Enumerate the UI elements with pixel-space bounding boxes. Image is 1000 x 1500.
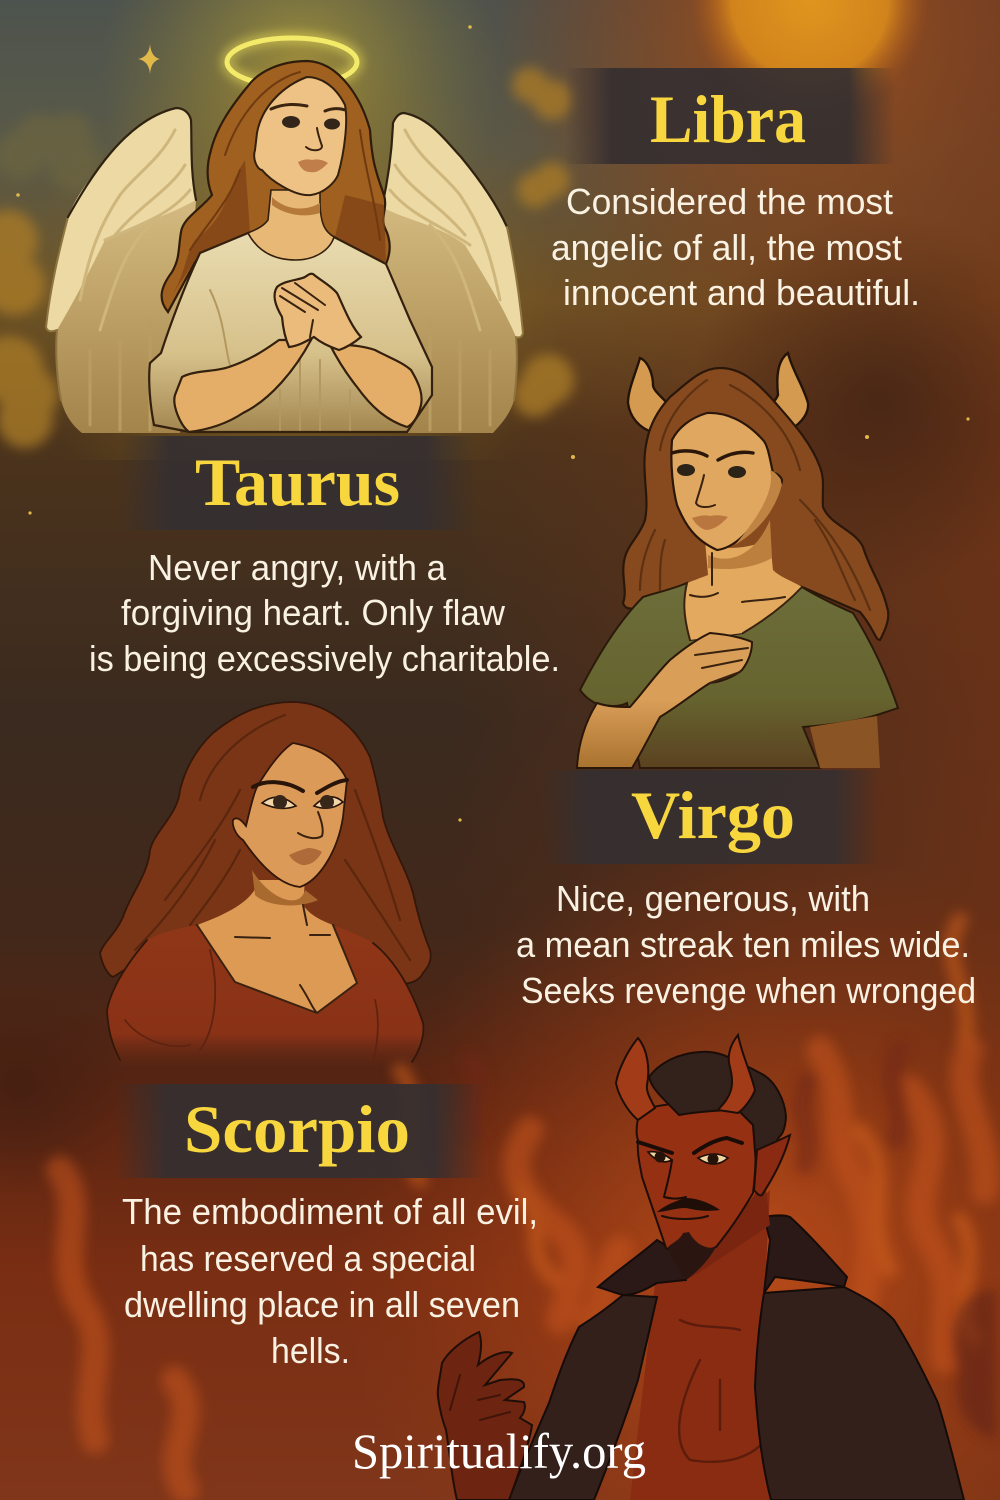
neckline — [197, 905, 357, 1013]
text: Scorpio description: hells. — [271, 1330, 350, 1371]
banner: Taurus — [120, 436, 475, 530]
horns — [616, 1035, 755, 1120]
neck and chest — [197, 880, 357, 1013]
face — [233, 743, 347, 887]
text: Virgo description: Seeks revenge when wronged — [521, 970, 976, 1011]
right collar — [764, 1216, 847, 1293]
horns — [628, 353, 808, 432]
dress — [107, 925, 423, 1068]
hair — [623, 368, 888, 640]
heading: Libra: Libra — [650, 81, 806, 157]
text: Taurus description — [89, 547, 560, 679]
text: Virgo description: Nice, generous, with — [556, 878, 870, 919]
shirt — [580, 583, 898, 768]
jacket — [509, 1216, 964, 1500]
figure: angel — [46, 38, 523, 433]
text: Taurus description: is being excessively charitable. — [89, 638, 560, 679]
hair — [100, 702, 431, 983]
text: Virgo description: a mean streak ten miles wide. — [516, 924, 970, 965]
text: Libra description: Considered the most — [566, 181, 893, 222]
halo — [227, 38, 357, 86]
face — [671, 413, 782, 550]
left wing — [46, 108, 196, 433]
praying hands — [275, 274, 361, 350]
raised hand — [438, 1332, 532, 1500]
text: Libra description — [551, 181, 920, 313]
neck lines — [684, 553, 802, 640]
tunic — [149, 233, 432, 432]
collars — [598, 1240, 690, 1295]
text: Scorpio description — [122, 1191, 538, 1371]
neck and chest — [684, 540, 802, 640]
right wing — [382, 113, 523, 433]
banner: Virgo — [540, 770, 880, 864]
star and sparks — [16, 25, 970, 822]
figure: stern woman — [100, 702, 431, 1068]
devil head — [616, 1035, 790, 1280]
figure: woman with horns — [577, 353, 898, 768]
neck shadow — [272, 197, 320, 215]
heading: Scorpio: Scorpio — [184, 1091, 410, 1167]
text: Libra description: angelic of all, the most — [551, 227, 902, 268]
text: Scorpio description: The embodiment of all evil, — [122, 1191, 538, 1232]
torso — [630, 1190, 780, 1500]
neck shadow — [252, 870, 318, 905]
hand on chest — [577, 633, 752, 768]
chest lines — [679, 1320, 765, 1462]
text: Virgo description — [516, 878, 976, 1011]
text: Taurus description: forgiving heart. Only flaw — [121, 592, 506, 633]
neck — [680, 1180, 770, 1280]
text: Libra description: innocent and beautiful. — [563, 272, 920, 313]
banner: Libra — [565, 68, 895, 164]
right arm — [810, 716, 880, 768]
arms — [174, 340, 422, 432]
neck — [248, 190, 334, 260]
face — [254, 77, 346, 195]
ear — [754, 1135, 790, 1195]
hair — [162, 61, 390, 312]
heading: Virgo: Virgo — [631, 777, 795, 853]
text: Scorpio description: dwelling place in all seven — [124, 1284, 520, 1325]
text: Scorpio description: has reserved a special — [140, 1238, 476, 1279]
figure: devil — [438, 1035, 964, 1500]
neck shadow — [708, 520, 772, 569]
clouds — [0, 67, 574, 448]
features — [638, 1138, 742, 1280]
devil hair — [649, 1052, 786, 1177]
heading: Taurus: Taurus — [195, 444, 400, 520]
text: Taurus description: Never angry, with a — [148, 547, 447, 588]
flames — [60, 920, 985, 1490]
banner: Scorpio — [115, 1084, 485, 1178]
footer: site name: Spiritualify.org — [352, 1423, 646, 1479]
